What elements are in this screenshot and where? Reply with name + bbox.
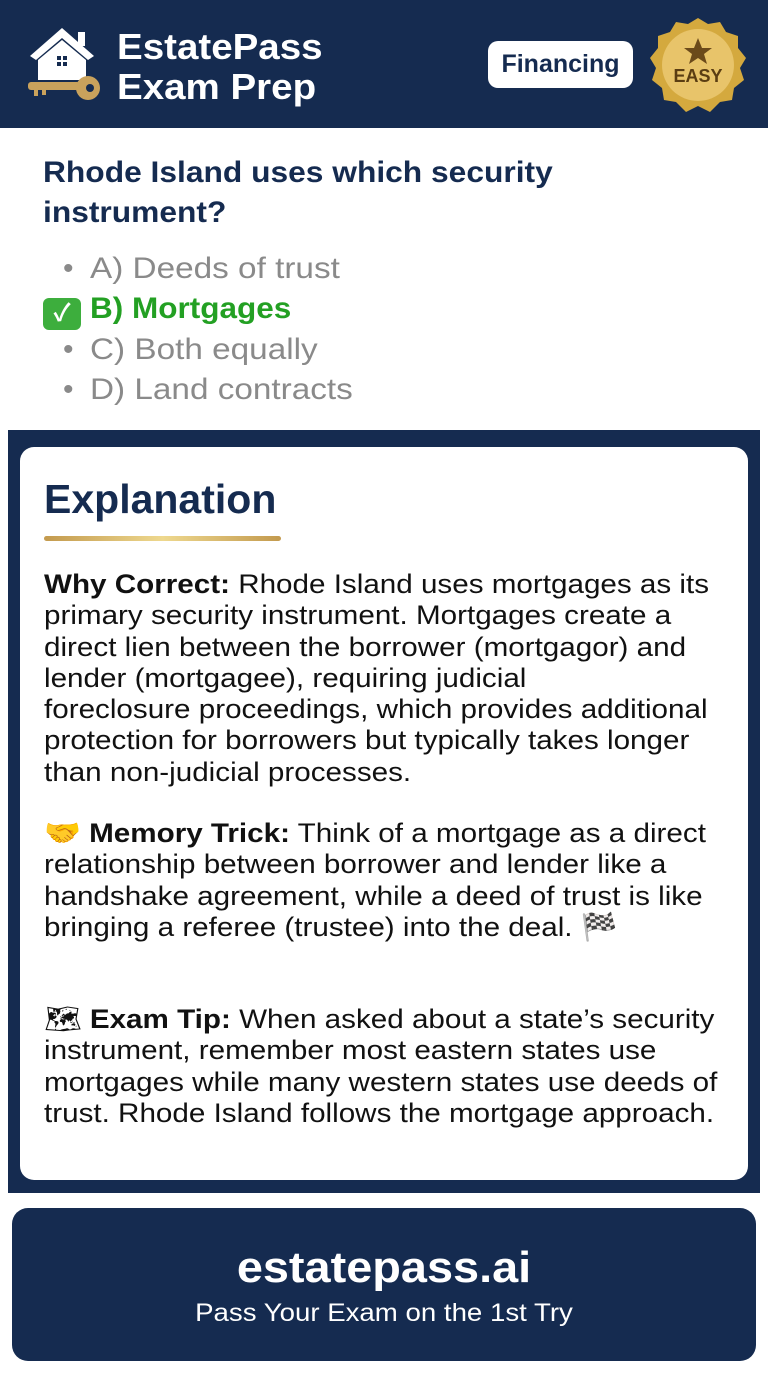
brand title: Exam Prep (117, 66, 316, 107)
icon: house with key (28, 28, 100, 100)
answer options (43, 252, 353, 406)
option C: • (63, 333, 74, 366)
header (0, 0, 768, 128)
text: memory trick: bringing a referee (trustee) into the deal. 🏁 (44, 912, 618, 942)
question (43, 156, 553, 229)
text: why correct: foreclosure proceedings, which provides additional (44, 694, 708, 724)
brand title (117, 26, 323, 107)
footer tagline: Pass Your Exam on the 1st Try (195, 1299, 573, 1327)
brand title: EstatePass (117, 26, 323, 67)
badge: EASY: EASY (673, 66, 723, 86)
text: memory trick: handshake agreement, while a deed of trust is like (44, 881, 703, 911)
option A: • (63, 252, 74, 285)
text: memory trick: relationship between borrower and lender like a (44, 849, 666, 879)
footer url: estatepass.ai (237, 1243, 531, 1292)
badge: EASY (650, 18, 746, 112)
tag: Financing: Financing (501, 50, 620, 78)
footer (12, 1208, 756, 1361)
text: exam tip (44, 1004, 718, 1128)
option D: • (63, 373, 74, 406)
text: why correct: direct lien between the borrower (mortgagor) and (44, 632, 686, 662)
text: memory trick: 🤝 Memory Trick: Think of a mortgage as a direct (44, 818, 706, 848)
panel: explanation (8, 430, 760, 1193)
option A: A) Deeds of trust (90, 252, 340, 285)
heading: Explanation: Explanation (44, 476, 276, 522)
option C: C) Both equally (90, 333, 318, 366)
tag: Financing (488, 41, 633, 88)
text: why correct (44, 569, 709, 787)
gold underline (44, 536, 281, 541)
text: exam tip: instrument, remember most eastern states use (44, 1035, 656, 1065)
text: exam tip: 🗺 Exam Tip: When asked about a state’s security (44, 1004, 714, 1034)
question: Rhode Island uses which security (43, 156, 553, 189)
text: exam tip: mortgages while many western states use deeds of (44, 1067, 717, 1097)
option D: D) Land contracts (90, 373, 353, 406)
text: why correct: Why Correct: Rhode Island uses mortgages as its (44, 569, 709, 599)
option B correct: B) Mortgages (90, 292, 291, 325)
text: memory trick (44, 818, 706, 942)
question: instrument? (43, 196, 226, 229)
text: why correct: lender (mortgagee), requiring judicial (44, 663, 526, 693)
text: why correct: than non-judicial processes. (44, 757, 411, 787)
text: why correct: primary security instrument. Mortgages create a (44, 600, 671, 630)
option B correct: ✓ (53, 300, 71, 327)
text: exam tip: trust. Rhode Island follows the mortgage approach. (44, 1098, 714, 1128)
text: why correct: protection for borrowers but typically takes longer (44, 725, 689, 755)
